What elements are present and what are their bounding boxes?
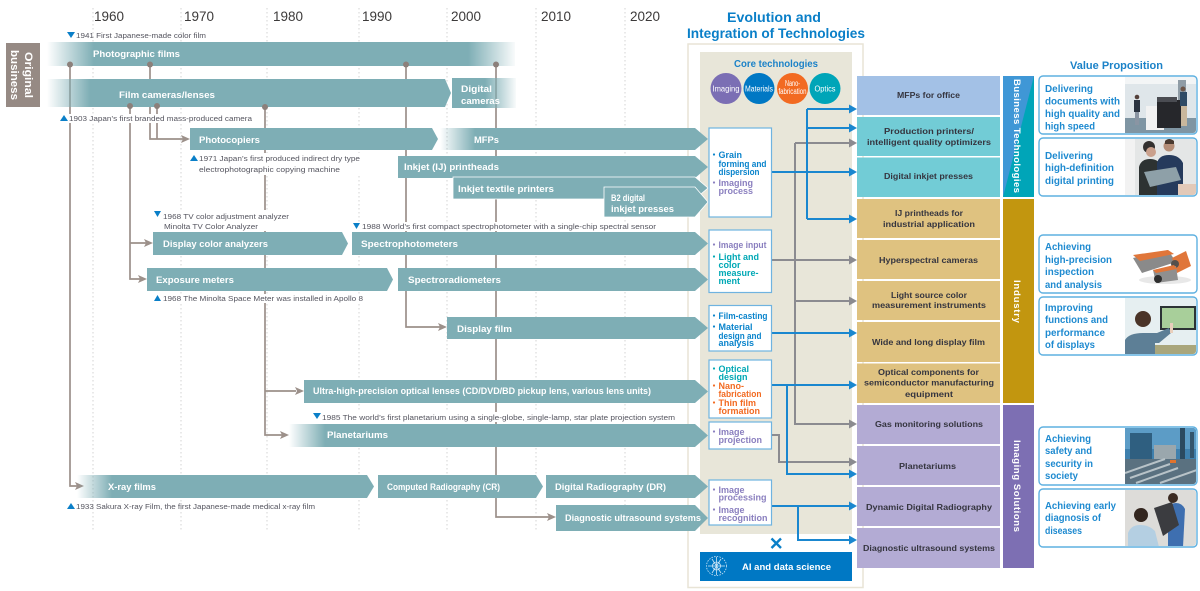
core technology circles: fabrication xyxy=(778,87,806,96)
card: displays xyxy=(1039,297,1197,355)
bar: computed radiography xyxy=(378,475,543,498)
tech box: film-casting and material design: Film-casting xyxy=(718,311,768,321)
card: diagnosis xyxy=(1039,489,1197,547)
tech box: image input and color measurement xyxy=(709,230,772,292)
tech box: image input and color measurement: Image input xyxy=(718,240,766,250)
products: industry: industrial application xyxy=(883,219,975,229)
core technology circles xyxy=(710,73,840,104)
bar: MFPs xyxy=(440,128,708,150)
milestone note: 1968 Apollo: 1968 The Minolta Space Meter was installed in Apollo 8 xyxy=(163,294,363,303)
bar: photocopiers: Photocopiers xyxy=(199,135,260,146)
bar: digital cameras: cameras xyxy=(461,96,500,107)
heading: core technologies: Core technologies xyxy=(734,58,818,70)
tech box: image projection: Image xyxy=(718,427,745,437)
card: safety: security in xyxy=(1045,459,1093,470)
products: industry: measurement instruments xyxy=(872,300,986,310)
bar: digital radiography xyxy=(546,475,708,498)
bar: B2 digital inkjet presses xyxy=(604,187,708,217)
card: digital printing xyxy=(1039,138,1197,196)
products: industry: IJ printheads for xyxy=(895,208,964,218)
milestone note: 1968 TV color xyxy=(154,210,291,231)
tech box: optical design and nano-fabrication: Thin film xyxy=(718,398,756,408)
bar: inkjet printheads: Inkjet (IJ) printheads xyxy=(404,162,499,173)
AI and data science banner: AI and data science xyxy=(742,562,831,573)
core technology circles: Optics xyxy=(814,84,836,94)
bar: inkjet textile printers xyxy=(453,177,708,199)
bar: x-ray films: X-ray films xyxy=(108,482,156,493)
products: business technologies: Production printers/ xyxy=(884,126,975,136)
original business label: business xyxy=(8,50,20,100)
bar: display film: Display film xyxy=(457,324,512,335)
bar: inkjet printheads xyxy=(398,156,708,178)
bar: computed radiography: Computed Radiography (CR) xyxy=(387,482,500,493)
tech box: film-casting and material design: Material xyxy=(718,322,753,332)
category: industry: Industry xyxy=(1011,280,1022,324)
tech box: grain forming: dispersion xyxy=(718,167,760,177)
products: business technologies xyxy=(857,76,1000,197)
products: imaging solutions xyxy=(857,405,1000,568)
bar: photocopiers xyxy=(190,128,438,150)
bar: diagnostic ultrasound systems xyxy=(556,505,708,531)
tech box: grain forming: process xyxy=(718,186,753,196)
card: safety: society xyxy=(1045,471,1078,482)
bar: exposure meters: Exposure meters xyxy=(156,275,234,286)
card: digital printing: Delivering xyxy=(1045,151,1093,162)
products: industry: semiconductor manufacturing xyxy=(864,378,994,388)
bar: digital cameras: Digital xyxy=(461,84,492,95)
category: imaging solutions: Imaging Solutions xyxy=(1011,440,1022,532)
card: diagnosis: diagnosis of xyxy=(1045,513,1102,524)
photo: industrial plant xyxy=(1125,427,1197,485)
tech box: image processing and recognition: processing xyxy=(718,492,767,502)
tech box: image input and color measurement: color xyxy=(718,260,741,270)
title: Integration of Technologies xyxy=(687,25,865,41)
card: documents: documents with xyxy=(1045,96,1120,108)
title xyxy=(687,9,865,41)
milestone note: 1903: 1903 Japan’s first branded mass-produced camera xyxy=(69,114,253,123)
bar: film cameras and lenses: Film cameras/lenses xyxy=(119,90,215,101)
bar: spectroradiometers: Spectroradiometers xyxy=(408,275,501,286)
tech box: optical design and nano-fabrication: design xyxy=(718,372,748,382)
AI and data science banner xyxy=(700,552,852,581)
card: inspection: and analysis xyxy=(1045,280,1102,291)
card: displays: performance xyxy=(1045,328,1105,339)
timeline year axis: 2000 xyxy=(451,9,481,24)
bar: inkjet textile printers: Inkjet textile printers xyxy=(458,184,554,195)
milestone note: 1971: electrophotographic copying machine xyxy=(199,165,340,174)
tech box: optical design and nano-fabrication: fabrication xyxy=(718,389,762,399)
card: displays: functions and xyxy=(1045,315,1108,326)
tech box: optical design and nano-fabrication: Optical xyxy=(718,364,749,374)
tech box: image processing and recognition: recognition xyxy=(718,513,768,523)
category: business technologies xyxy=(1003,76,1034,197)
bar: diagnostic ultrasound systems: Diagnostic ultrasound systems xyxy=(565,513,701,524)
bar: exposure meters xyxy=(147,268,393,291)
timeline year axis: 1990 xyxy=(362,9,392,24)
products: industry: equipment xyxy=(905,389,953,399)
original business label: Original xyxy=(22,52,34,98)
card: safety xyxy=(1039,427,1197,485)
timeline year axis: 1960 xyxy=(94,9,124,24)
photo: x-ray panel examination xyxy=(1125,489,1197,547)
card: documents: high speed xyxy=(1045,122,1095,132)
tech box: image input and color measurement: Light and xyxy=(718,252,759,262)
milestone note: 1971 xyxy=(190,153,362,175)
core technology circles: Imaging xyxy=(712,84,740,94)
milestone note: 1985: 1985 The world’s first planetarium using a single-globe, single-lamp, star plate projection system xyxy=(322,413,675,422)
products: imaging solutions: Dynamic Digital Radiography xyxy=(866,502,992,512)
tech box: optical design and nano-fabrication: Nano- xyxy=(718,381,744,391)
tech box: grain forming xyxy=(709,128,772,217)
bar: ultra-high-precision optical lenses xyxy=(304,380,708,403)
card: safety: Achieving xyxy=(1045,434,1091,445)
bar: MFPs: MFPs xyxy=(474,135,499,146)
branch dots xyxy=(67,62,499,110)
tech box: image processing and recognition: Image xyxy=(718,485,745,495)
tech box: image projection xyxy=(709,422,772,449)
core technology circles: Materials xyxy=(745,84,773,94)
tech box: optical design and nano-fabrication xyxy=(709,360,772,418)
products: business technologies: MFPs for office xyxy=(897,90,960,100)
lineage connector lines xyxy=(70,64,556,521)
card: safety: safety and xyxy=(1045,446,1092,457)
bar: digital radiography: Digital Radiography (DR) xyxy=(555,482,666,493)
products: imaging solutions: Gas monitoring solutions xyxy=(875,419,983,429)
card: digital printing: high-definition xyxy=(1045,163,1114,174)
milestone note: 1933: 1933 Sakura X-ray Film, the first Japanese-made medical x-ray film xyxy=(76,502,315,511)
bar: display color analyzers: Display color analyzers xyxy=(163,239,268,250)
products: industry: Light source color xyxy=(891,290,968,300)
products: imaging solutions: Planetariums xyxy=(899,461,956,471)
timeline year axis xyxy=(93,8,660,530)
tech box: image input and color measurement: ment xyxy=(718,276,740,286)
tech box: optical design and nano-fabrication: formation xyxy=(718,406,760,416)
products: business technologies: Digital inkjet presses xyxy=(884,171,973,181)
milestone note: 1988: 1988 World’s first compact spectrophotometer with a single-chip spectral sensor xyxy=(362,222,657,231)
tech box: film-casting and material design: design and xyxy=(718,331,762,341)
bar: ultra-high-precision optical lenses: Ultra-high-precision optical lenses (CD/DVD/BD pickup lens, various lens units) xyxy=(313,386,651,397)
heading: value proposition: Value Proposition xyxy=(1070,60,1163,72)
card: digital printing: digital printing xyxy=(1045,176,1114,187)
tech box: film-casting and material design: analysis xyxy=(718,338,754,348)
bar: planetariums xyxy=(289,424,708,447)
milestone note: 1968 TV color: 1968 TV color adjustment analyzer xyxy=(163,212,289,221)
card: inspection: inspection xyxy=(1045,267,1094,278)
bar: photographic films: Photographic films xyxy=(93,49,180,60)
card: inspection: Achieving xyxy=(1045,242,1091,253)
bar: B2 digital inkjet presses: B2 digital xyxy=(611,193,645,204)
photo: man watching television xyxy=(1125,297,1197,355)
card: displays: Improving xyxy=(1045,303,1093,314)
products: industry: Optical components for xyxy=(878,367,980,377)
bar: spectrophotometers: Spectrophotometers xyxy=(361,239,458,250)
card: documents: Delivering xyxy=(1045,84,1093,95)
products: industry: Hyperspectral cameras xyxy=(879,255,978,265)
photo: hyperspectral cameras xyxy=(1133,250,1191,284)
tech box: image processing and recognition: Image xyxy=(718,505,745,515)
products: industry: Wide and long display film xyxy=(872,337,985,347)
bar: B2 digital inkjet presses: inkjet presses xyxy=(611,204,674,215)
tech box: film-casting and material design xyxy=(709,306,772,351)
bar: display film xyxy=(447,317,708,339)
bar: film cameras and lenses xyxy=(47,79,451,107)
milestone note: 1971: 1971 Japan’s first produced indirect dry type xyxy=(199,154,360,163)
card: diagnosis: diseases xyxy=(1045,526,1082,537)
timeline year axis: 2010 xyxy=(541,9,571,24)
icon: AI brain xyxy=(706,556,726,576)
panel: technologies frame xyxy=(688,44,863,588)
bar: spectroradiometers xyxy=(398,268,708,291)
bar: display color analyzers xyxy=(153,232,348,255)
products: industry xyxy=(857,199,1000,403)
tech box: image projection: projection xyxy=(718,435,762,445)
products: imaging solutions: Diagnostic ultrasound systems xyxy=(863,543,995,553)
category: industry xyxy=(1003,199,1034,403)
category: business technologies: Business Technologies xyxy=(1011,79,1022,193)
card: inspection: high-precision xyxy=(1045,255,1112,266)
title: Evolution and xyxy=(727,9,821,25)
card: displays: of displays xyxy=(1045,340,1095,351)
category: imaging solutions xyxy=(1003,405,1034,568)
card: documents xyxy=(1039,76,1197,134)
milestone note: 1941: 1941 First Japanese-made color film xyxy=(76,31,206,40)
tech box: grain forming: Imaging xyxy=(718,178,753,188)
tech box: image input and color measurement: measure- xyxy=(718,268,759,278)
icon: multiply cross xyxy=(772,538,781,548)
photo: office printer xyxy=(1125,76,1197,134)
tech box: grain forming: forming and xyxy=(718,159,766,169)
milestone note: 1968 TV color: Minolta TV Color Analyzer xyxy=(164,222,258,231)
bar: x-ray films xyxy=(77,475,374,498)
timeline year axis: 1980 xyxy=(273,9,303,24)
timeline year axis: 2020 xyxy=(630,9,660,24)
card: inspection xyxy=(1039,235,1197,293)
core technology circles: Nano- xyxy=(785,79,800,88)
timeline year axis: 1970 xyxy=(184,9,214,24)
bar: spectrophotometers xyxy=(352,232,708,255)
bar: digital cameras xyxy=(452,78,516,108)
original business label xyxy=(6,43,40,107)
card: diagnosis: Achieving early xyxy=(1045,501,1116,512)
bar: planetariums: Planetariums xyxy=(327,430,388,441)
tech box: image processing and recognition xyxy=(709,480,772,525)
tech box: grain forming: Grain xyxy=(718,150,742,160)
photo: two people with print xyxy=(1125,138,1197,196)
bar: photographic films xyxy=(47,42,515,66)
technology-to-product connectors xyxy=(771,104,857,544)
card: documents: high quality and xyxy=(1045,109,1120,120)
products: business technologies: intelligent quality optimizers xyxy=(867,137,991,147)
